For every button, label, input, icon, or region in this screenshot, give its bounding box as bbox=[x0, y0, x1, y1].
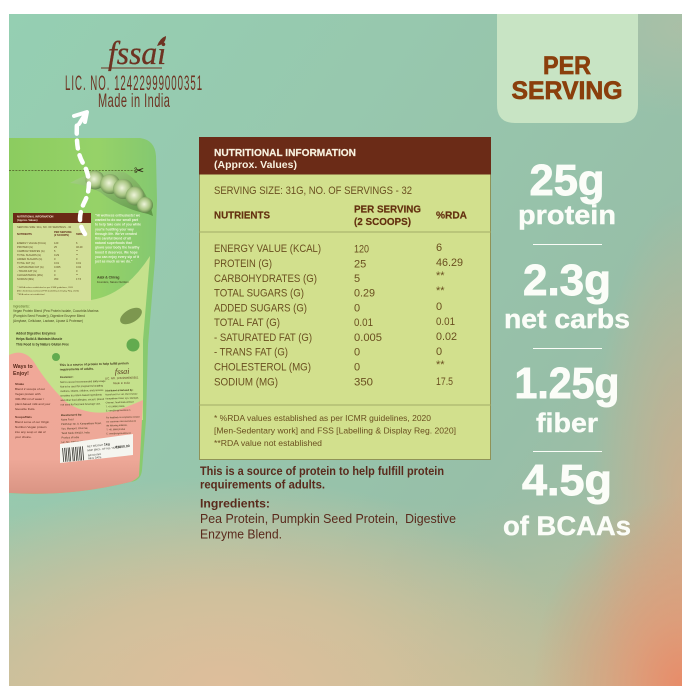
column headings: NUTRIENTS bbox=[214, 210, 270, 222]
founders note: natural superfoods that bbox=[95, 241, 133, 245]
pea pod illustration bbox=[70, 170, 153, 216]
table header bbox=[199, 137, 491, 174]
mini nutrition table: ENERGY VALUE (KCAL) bbox=[17, 241, 46, 245]
mini nutrition table: ** bbox=[76, 253, 78, 257]
mini nutrition table: ADDED SUGARS (G) bbox=[17, 257, 42, 261]
licence number: LIC. NO. 12422999000351 bbox=[65, 72, 202, 95]
founders note: Founders, Nature Nutrition bbox=[97, 280, 129, 284]
stat: net carbs: 2.3g bbox=[523, 256, 611, 305]
mini nutrition table: 25 bbox=[54, 245, 57, 249]
pumpkin seed and pea bbox=[52, 304, 145, 361]
protein source statement bbox=[200, 466, 444, 492]
mini nutrition table: 0.01 bbox=[76, 261, 82, 265]
nutrient rows: 0 bbox=[436, 301, 442, 313]
mini nutrition table: **RDA value not established bbox=[17, 293, 45, 296]
mini nutrition table: %RDA bbox=[76, 232, 84, 236]
mini nutrition table: TOTAL FAT (G) bbox=[17, 261, 35, 265]
column headings: PER SERVING bbox=[354, 204, 421, 216]
founders note: to help take care of you while bbox=[95, 223, 141, 227]
ways to enjoy: Enjoy! bbox=[13, 371, 29, 377]
source of protein and disclaimer: Product of India bbox=[61, 436, 80, 440]
source of protein and disclaimer bbox=[60, 361, 131, 444]
ways to enjoy: 300-350 ml of water / bbox=[15, 397, 44, 401]
mini nutrition table: [Men-Sedentary work] and FSS [Labelling & Display Reg. 2020] bbox=[17, 290, 79, 292]
mini nutrition table: 5 bbox=[54, 249, 56, 253]
ingredients on pouch: Ingredients: bbox=[13, 304, 30, 308]
footnotes bbox=[214, 413, 456, 448]
pouch body bbox=[9, 138, 157, 494]
nutrient rows: CARBOHYDRATES (G) bbox=[214, 273, 317, 285]
ingredients on pouch: (Amylase, Cellulase, Lactase, Lipase & Protease) bbox=[13, 319, 83, 323]
mini nutrition table: (Approx. Values) bbox=[17, 218, 38, 222]
small fssai mark on pouch: LIC. NO. 12422999000351 bbox=[105, 376, 139, 380]
source of protein and disclaimer: Disclaimer: bbox=[60, 376, 74, 379]
small fssai mark on pouch: our customer care executive at bbox=[106, 420, 136, 423]
per serving badge bbox=[497, 14, 638, 123]
mini nutrition table: NUTRITIONAL INFORMATION bbox=[17, 214, 53, 218]
mini nutrition table: 0 bbox=[76, 257, 78, 261]
founders note: you can enjoy every sip of it bbox=[95, 255, 140, 259]
nutrient rows: 0 bbox=[354, 346, 360, 358]
nutrient rows: TOTAL FAT (G) bbox=[214, 317, 280, 329]
small fssai mark on pouch bbox=[105, 367, 140, 435]
founders note: glows your body the healthy bbox=[95, 246, 140, 250]
ingredients on pouch: Helps Build & Maintain Muscle bbox=[16, 337, 62, 341]
mini nutrition table: 46.29 bbox=[76, 245, 83, 249]
ingredients on pouch: Added Digestive Enzymes bbox=[16, 332, 56, 336]
mini nutrition table: 120 bbox=[54, 241, 59, 245]
stat: fiber: 1.25g bbox=[514, 359, 620, 408]
nutrient rows: 25 bbox=[354, 258, 366, 270]
protein source statement: requirements of adults. bbox=[200, 480, 325, 492]
ingredients on pouch: Vegan Protein Blend (Pea Protein Isolate, Cucurbita Maxima bbox=[13, 309, 99, 313]
source of protein and disclaimer: and other food allergies, except. Stored bbox=[60, 398, 105, 402]
mini nutrition table: 0.29 bbox=[54, 253, 60, 257]
nutrition table panel bbox=[199, 137, 491, 460]
nutrient rows: ** bbox=[436, 359, 445, 371]
barcode label: BATCH NO bbox=[88, 452, 101, 457]
table header: NUTRITIONAL INFORMATION bbox=[214, 148, 356, 159]
nutrient rows: 0 bbox=[436, 346, 442, 358]
founders note bbox=[94, 214, 141, 284]
mini nutrition table: 0 bbox=[54, 257, 56, 261]
source of protein and disclaimer: Nutra Food bbox=[61, 418, 74, 422]
nutrient rows bbox=[214, 242, 463, 388]
nutrient rows: SODIUM (MG) bbox=[214, 376, 278, 388]
per serving badge: SERVING bbox=[512, 77, 622, 105]
barcode label: NET WEIGHT 1kg bbox=[87, 442, 110, 448]
tear line and scissors bbox=[9, 164, 144, 178]
mini nutrition table: - TRANS FAT (G) bbox=[17, 269, 37, 273]
ways to enjoy: plant-based milk and your bbox=[15, 402, 50, 406]
founders note: this careful blend of all bbox=[95, 236, 131, 240]
nutrient rows: 350 bbox=[354, 376, 373, 388]
barcode label: MRP (INCL. OF ALL TAXES) bbox=[87, 445, 121, 452]
mini nutrition table: ** bbox=[76, 249, 78, 253]
source of protein and disclaimer: Manufactured By: bbox=[61, 413, 82, 417]
fssai logo and licence bbox=[65, 36, 202, 112]
ways to enjoy: into any soup or dal of bbox=[15, 430, 46, 434]
small fssai mark on pouch: E: care@originnutrition.in bbox=[106, 432, 132, 435]
nutrient rows: 0 bbox=[354, 302, 360, 314]
nutrient rows: ENERGY VALUE (KCAL) bbox=[214, 243, 321, 255]
nutrient rows: 0 bbox=[354, 362, 360, 374]
stat: BCAAs bbox=[503, 456, 631, 541]
mini nutrition table: 350 bbox=[54, 277, 59, 281]
stat list bbox=[503, 156, 631, 541]
footnotes: **RDA value not established bbox=[214, 438, 322, 448]
stat: net carbs: net carbs bbox=[504, 304, 630, 334]
mini nutrition table bbox=[13, 213, 91, 301]
source of protein and disclaimer: Lic. No. 10024043000277 bbox=[62, 440, 91, 444]
mini nutrition table: 0.02 bbox=[76, 265, 82, 269]
ways to enjoy: Ways to bbox=[13, 364, 33, 370]
small fssai mark on pouch: Karapakkam Road, Vyn, Manapet, bbox=[105, 397, 139, 400]
small fssai mark on pouch: Made in India bbox=[113, 381, 130, 385]
mini nutrition table: 0 bbox=[76, 269, 78, 273]
mini nutrition table: 0.01 bbox=[54, 261, 60, 265]
column headings: (2 SCOOPS) bbox=[354, 216, 411, 228]
column headings: %RDA bbox=[436, 210, 467, 222]
nutrient rows: 0.02 bbox=[436, 331, 457, 343]
source of protein and disclaimer: requirements of adults. bbox=[60, 367, 94, 372]
small fssai mark on pouch: For feedback & complaints contact bbox=[106, 415, 140, 419]
founders note: you're hustling your way bbox=[95, 227, 134, 231]
nutrient rows: 46.29 bbox=[436, 257, 463, 269]
ways to enjoy: favourite fruits. bbox=[15, 407, 35, 411]
nutrient rows: 120 bbox=[354, 244, 369, 256]
small fssai mark on pouch: Distributed & Marketed By: bbox=[105, 389, 134, 392]
source of protein and disclaimer: not used for food and beverage use. bbox=[61, 402, 101, 407]
stat: fiber bbox=[514, 359, 620, 438]
nutrient rows: 0.01 bbox=[436, 316, 455, 328]
founders note: through life. We've created bbox=[95, 232, 137, 236]
ways to enjoy: Shake bbox=[15, 382, 24, 386]
ingredients: Pea Protein, Pumpkin Seed Protein, Digestive bbox=[200, 512, 456, 526]
nutrient rows: 0.29 bbox=[354, 288, 375, 300]
dashed arrow to fssai mark bbox=[74, 112, 89, 234]
stat: BCAAs: 4.5g bbox=[522, 456, 612, 505]
mini nutrition table: (2 SCOOPS) bbox=[54, 233, 69, 237]
founders note: boost it deserves. We hope bbox=[95, 250, 138, 254]
stat: net carbs bbox=[504, 256, 630, 334]
mini nutrition table: * %RDA values established as per ICMR guidelines, 2020 bbox=[17, 286, 74, 289]
footnotes: [Men-Sedentary work] and FSS [Labelling & Display Reg. 2020] bbox=[214, 426, 456, 436]
source of protein and disclaimer: Plot/Shop No. 8, Karapakkam Road, bbox=[61, 422, 102, 426]
mini nutrition table: SERVING SIZE: 31G, NO. OF SERVINGS - 32 bbox=[17, 225, 72, 229]
ways to enjoy: Nutrition Vegan protein bbox=[15, 425, 47, 429]
nutrient rows: 17.5 bbox=[436, 376, 453, 388]
mini nutrition table: PROTEIN (G) bbox=[17, 245, 33, 249]
table header: (Approx. Values) bbox=[214, 160, 297, 171]
mini nutrition table: TOTAL SUGARS (G) bbox=[17, 253, 41, 257]
mini nutrition table: CHOLESTEROL (MG) bbox=[17, 273, 43, 277]
small fssai mark on pouch: T: +91 9884123456 bbox=[106, 429, 126, 431]
fssai wordmark: fssai bbox=[108, 36, 166, 72]
ingredients on pouch: (Pumpkin Seed Powder)), Digestive Enzyme Blend bbox=[13, 314, 85, 318]
source of protein and disclaimer: Vyn, Manapet, Chennai, bbox=[61, 427, 88, 431]
small fssai mark on pouch: NutraFood Pvt. Ltd, Plot 8 Sector bbox=[105, 393, 138, 396]
ingredients on pouch bbox=[13, 304, 99, 346]
ingredients bbox=[200, 496, 456, 542]
barcode label bbox=[60, 434, 133, 463]
source of protein and disclaimer: sensitive to protein-based ingredients bbox=[60, 393, 103, 398]
small fssai mark on pouch: the following address, bbox=[106, 424, 128, 427]
stat: protein bbox=[518, 156, 616, 230]
source of protein and disclaimer: Tamil Nadu-600119, India bbox=[61, 431, 90, 435]
mini nutrition table: ** bbox=[76, 273, 78, 277]
pouch: product back bbox=[9, 138, 157, 494]
ways to enjoy bbox=[13, 364, 50, 439]
protein source statement: This is a source of protein to help fulfill protein bbox=[200, 466, 444, 478]
tear line and scissors: ✂ bbox=[134, 164, 144, 178]
mini nutrition table: PER SERVING bbox=[54, 230, 72, 234]
mini nutrition table: 0 bbox=[54, 269, 56, 273]
stat: protein: 25g bbox=[530, 156, 604, 205]
founders note: "Hi wellness enthusiasts! we bbox=[95, 214, 140, 218]
nutrient rows: ** bbox=[436, 285, 445, 297]
mini nutrition table: 6 bbox=[76, 241, 78, 245]
table body bbox=[200, 138, 490, 460]
pouch colour panels bbox=[9, 256, 150, 494]
nutrient rows: - SATURATED FAT (G) bbox=[214, 332, 312, 344]
nutrient rows: CHOLESTEROL (MG) bbox=[214, 362, 311, 374]
mini nutrition table: 0.005 bbox=[54, 265, 61, 269]
nutrient rows: 0.005 bbox=[354, 332, 382, 344]
small fssai mark on pouch: Chennai, Tamil Nadu-600119 bbox=[106, 402, 135, 404]
mini nutrition table: NUTRIENTS bbox=[17, 232, 32, 236]
founders note: wanted to do our small part bbox=[94, 218, 139, 222]
source of protein and disclaimer: Not to be used for pregnant & lactating bbox=[60, 384, 104, 389]
stat: BCAAs: of BCAAs bbox=[503, 511, 631, 541]
barcode label: MFG DATE bbox=[88, 455, 102, 460]
made in india: Made in India bbox=[98, 91, 170, 112]
nutrient rows: 0.01 bbox=[354, 317, 373, 329]
mini nutrition table: CARBOHYDRATES (G) bbox=[17, 249, 45, 253]
footnotes: * %RDA values established as per ICMR guidelines, 2020 bbox=[214, 413, 431, 423]
small fssai mark on pouch: T: +91 9884123456 bbox=[106, 406, 125, 408]
founders note: Aabi & Chirag bbox=[97, 276, 119, 280]
nutrient rows: ** bbox=[436, 270, 445, 282]
ways to enjoy: Soups/Dals bbox=[15, 415, 32, 419]
nutrient rows: PROTEIN (G) bbox=[214, 258, 272, 270]
ingredients: Enzyme Blend. bbox=[200, 528, 282, 542]
stat: fiber: fiber bbox=[536, 408, 599, 438]
founders note: just as much as we do." bbox=[94, 260, 133, 264]
column headings bbox=[214, 204, 467, 228]
source of protein and disclaimer: Not to exceed recommended daily usage bbox=[60, 380, 106, 384]
stat: protein: protein bbox=[518, 200, 616, 230]
mini nutrition table: 0 bbox=[54, 273, 56, 277]
serving size: SERVING SIZE: 31G, NO. OF SERVINGS - 32 bbox=[214, 185, 412, 197]
mini nutrition table: 17.5 bbox=[76, 277, 82, 281]
nutrient rows: 6 bbox=[436, 242, 442, 254]
nutrient rows: TOTAL SUGARS (G) bbox=[214, 288, 304, 300]
barcode label: ₹3000.00 bbox=[115, 444, 130, 449]
ways to enjoy: Blend some of our Origin bbox=[15, 420, 49, 424]
source of protein and disclaimer: This is a source of protein to help fulfill protein bbox=[60, 361, 129, 367]
nutrient rows: - TRANS FAT (G) bbox=[214, 346, 288, 358]
per serving badge: PER bbox=[543, 52, 591, 80]
nutrient rows: ADDED SUGARS (G) bbox=[214, 302, 307, 314]
small fssai mark on pouch: fssai bbox=[115, 367, 130, 376]
small fssai mark on pouch: E: care@originnutrition.in bbox=[106, 409, 131, 412]
ingredients: Ingredients: bbox=[200, 496, 270, 510]
ways to enjoy: your choice. bbox=[15, 435, 32, 439]
ways to enjoy: Vegan protein with bbox=[15, 392, 41, 396]
mini nutrition table: SODIUM (MG) bbox=[17, 277, 34, 281]
ingredients on pouch: This Food is by Nature Gluten Free bbox=[16, 342, 69, 346]
ways to enjoy: Blend 2 scoops of our bbox=[15, 387, 45, 391]
mini nutrition table: - SATURATED FAT (G) bbox=[17, 265, 44, 269]
nutrient rows: 5 bbox=[354, 273, 360, 285]
source of protein and disclaimer: mothers, infants, children, and persons bbox=[60, 389, 104, 393]
